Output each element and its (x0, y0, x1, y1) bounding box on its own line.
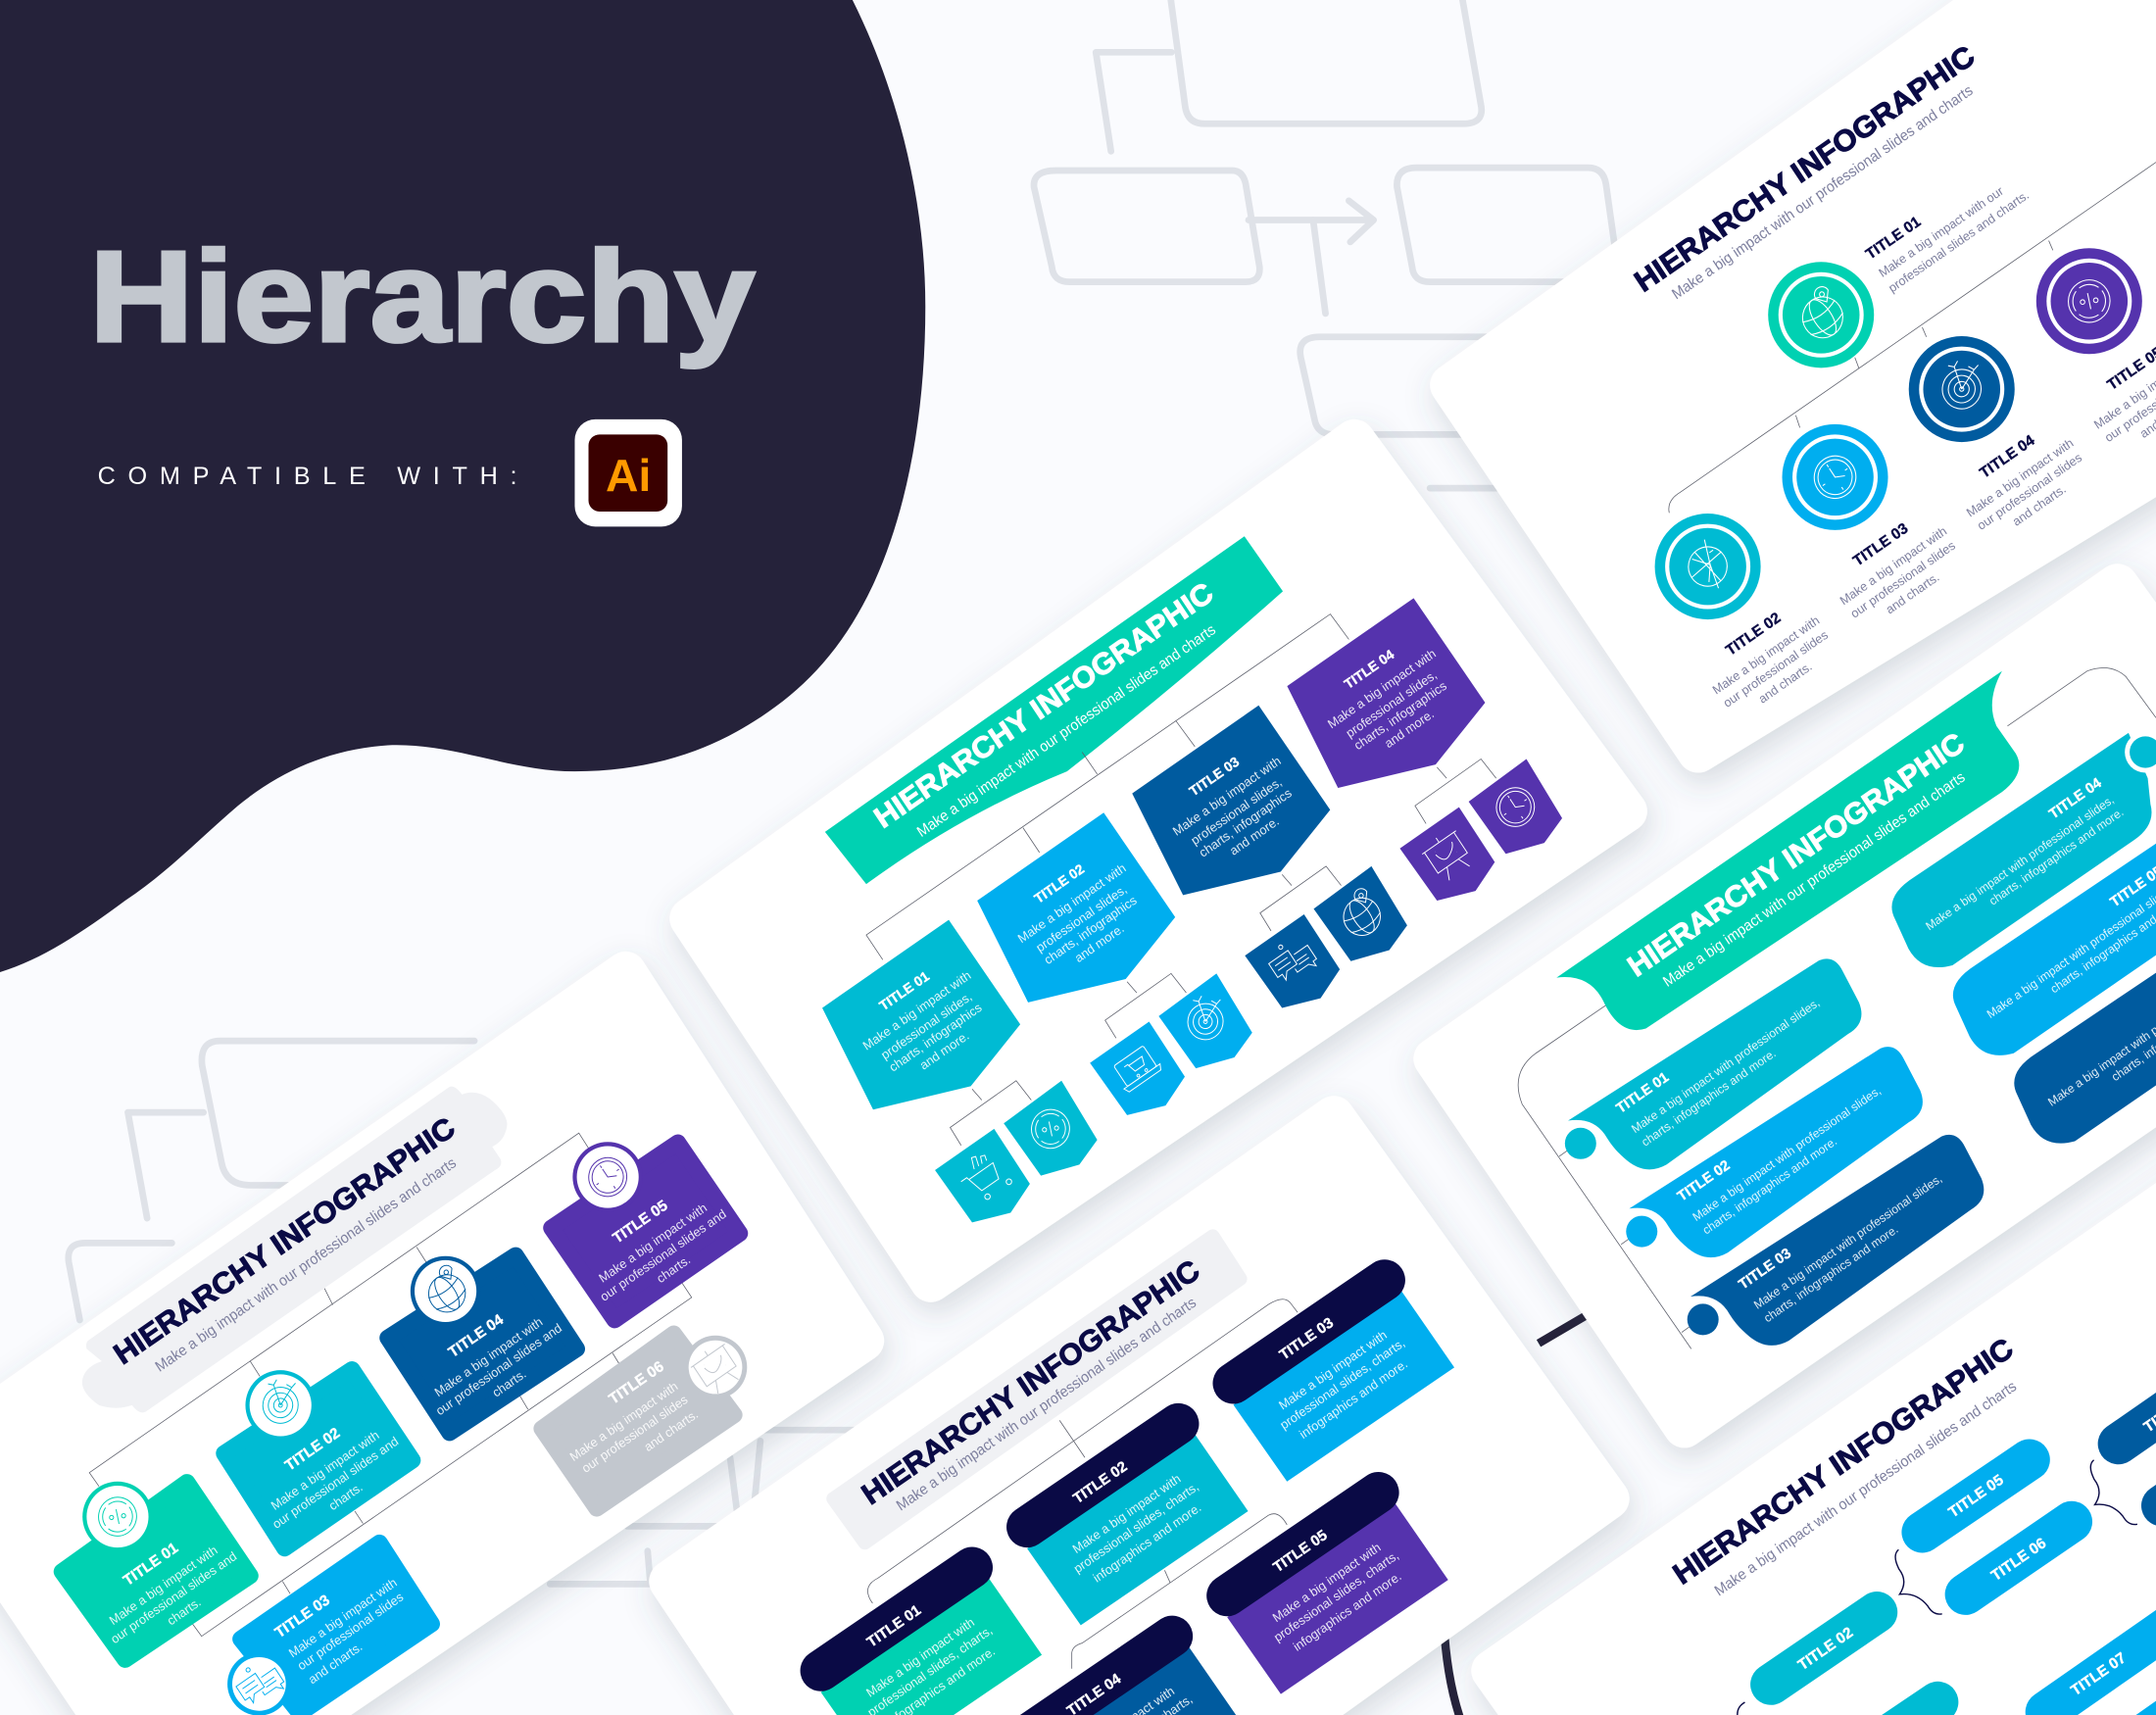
node: title 04: Make a big impact with (1964, 435, 2076, 520)
card: title 02: our professional slides and (270, 1434, 401, 1532)
card: title 04: charts, infographics (1351, 678, 1449, 753)
card: title 03 (1688, 1135, 1984, 1346)
node: title 01: TITLE 01 (1863, 213, 1924, 264)
card: title 02 (224, 1369, 413, 1548)
card: title 02: Make a big impact with professional slides, (1690, 1084, 1884, 1224)
card: title 04: TITLE 04 (1342, 646, 1396, 692)
card: title 01: Make a big impact with (863, 1615, 977, 1700)
panel: slide with ribbon cards (1434, 584, 2156, 1427)
node: title 02: and charts. (1755, 659, 1815, 707)
background hierarchy outlines (69, 0, 1620, 1584)
heading: HIERARCHY INFOGRAPHIC (857, 1254, 1205, 1511)
card: title 01 (62, 1482, 250, 1659)
card: title 03: Make a big impact with (286, 1575, 400, 1660)
card: title 05: Make a big impact with (596, 1200, 710, 1286)
card: title 04: charts. (489, 1366, 528, 1400)
card: title 02: Make a big impact with (1015, 860, 1129, 946)
braces (1738, 1460, 2137, 1715)
title blob (82, 1087, 507, 1412)
card: title 02: TITLE 02 (1070, 1458, 1130, 1507)
panel: slide with circles (1450, 0, 2156, 752)
card: title 04: TITLE 04 (446, 1311, 507, 1361)
node: title 03: our professional slides (1847, 538, 1958, 621)
pill: title 07 (2046, 1586, 2156, 1712)
node: title 04 (1909, 336, 2084, 533)
card: title 04 (1287, 598, 1562, 901)
card: title 03: and more. (1227, 813, 1282, 858)
connectors (89, 1133, 692, 1637)
pill: title 07: TITLE 07 (2068, 1649, 2129, 1699)
pill: title 05 (1922, 1459, 2030, 1532)
card: title 03: professional slides, (1188, 774, 1285, 848)
card: title 01: charts, infographics and more. (1639, 1047, 1779, 1150)
connectors (866, 614, 1348, 959)
card: title 02 (1626, 1047, 1923, 1257)
pill: title 06 (1966, 1522, 2072, 1594)
card: title 04 (1891, 731, 2156, 967)
card: title 01: charts. (165, 1594, 204, 1628)
node: title 02: our professional slides (1721, 627, 1831, 710)
card: title 05: professional slides, charts, (1271, 1547, 1401, 1644)
card: title 02: infographics and more. (1091, 1499, 1203, 1586)
heading: HIERARCHY INFOGRAPHIC (1629, 39, 1981, 299)
card: title 02: charts, infographics and more. (1700, 1134, 1839, 1237)
card: title 02: Make a big impact with (269, 1428, 382, 1513)
icon: Adobe Illustrator: Ai (606, 450, 651, 501)
card: title 04: Make a big impact with professional slides, (1923, 793, 2117, 933)
card: title 04: Make a big impact with (431, 1314, 545, 1399)
subheading: Make a big impact with our professional slides and charts (914, 621, 1219, 841)
node: title 03 (1783, 424, 1958, 621)
card: title 02: TITLE 02 (1675, 1157, 1733, 1205)
connector line (1669, 163, 2156, 513)
subheading: Make a big impact with our professional slides and charts (1712, 1378, 2020, 1599)
card: title 04: professional slides, (1344, 667, 1440, 741)
node: title 03: TITLE 03 (1850, 520, 1911, 569)
pill: title 05: TITLE 05 (1945, 1471, 2007, 1521)
panel: slide with pills and braces (1492, 986, 2156, 1715)
card: title 01: charts, infographics (886, 1000, 984, 1074)
card: title 05 (552, 1142, 740, 1320)
pill: lower cyan (1832, 1702, 1937, 1715)
card: title 03: professional slides, charts, (1277, 1335, 1407, 1432)
card: title 01: Make a big impact with (860, 967, 973, 1054)
pill: lower blue (2088, 1647, 2156, 1715)
card: title 03: Make a big impact with professional slides, (1751, 1171, 1944, 1312)
card: title 04: and more. (1382, 707, 1437, 751)
card: title 04 (388, 1255, 577, 1433)
node: title 05 (2036, 248, 2156, 445)
node: title 04: and charts. (2010, 481, 2069, 529)
card: title 02 (977, 812, 1252, 1115)
title tag (833, 1236, 1241, 1543)
pill: title 02 (1771, 1612, 1877, 1685)
card: title 01: Make a big impact with (107, 1543, 220, 1628)
subheading: Make a big impact with our professional slides and charts (153, 1154, 460, 1376)
panel: slide with dark header cards (669, 1116, 1609, 1715)
card: title 05: charts. (654, 1252, 693, 1286)
pill: title 02: TITLE 02 (1795, 1624, 1856, 1674)
node: title 02: Make a big impact with (1710, 612, 1822, 698)
banner (825, 536, 1283, 884)
card: title 02: charts. (326, 1480, 366, 1513)
card: title 02: and more. (1072, 920, 1127, 965)
card: title 03: infographics and more. (1297, 1356, 1410, 1442)
card: title 03: our professional slides (295, 1590, 406, 1673)
card: title 06: and charts. (641, 1406, 701, 1454)
card: title 05 (1953, 819, 2156, 1055)
card: title 03: Make a big impact with (1170, 754, 1284, 839)
connectors (1518, 668, 2156, 1348)
card: title 03 (227, 1543, 432, 1715)
card: title 02: TITLE 02 (1031, 860, 1087, 906)
card: title 01: and more. (917, 1028, 971, 1072)
card: title 04 (1021, 1637, 1242, 1715)
pill: navy upper (2119, 1368, 2156, 1444)
card: title 01: professional slides, (878, 989, 974, 1062)
card: title 01: TITLE 01 (121, 1540, 181, 1590)
heading: HIERARCHY INFOGRAPHIC (109, 1111, 461, 1371)
card: title 05: TITLE 05 (1270, 1527, 1330, 1576)
card: title 01: our professional slides and (108, 1548, 239, 1646)
card: title 04: TITLE 04 (2046, 775, 2105, 822)
panel: slide with banner and pennants (690, 440, 1627, 1282)
card: title 02: TITLE 02 (282, 1425, 343, 1475)
node: title 01: Make a big impact with our (1876, 183, 2006, 280)
card: title 01: TITLE 01 (1614, 1069, 1672, 1117)
card: title 03: charts, infographics (1197, 785, 1295, 860)
card: title 03 (1132, 706, 1407, 1007)
connectors (867, 1299, 1298, 1669)
card: title 06: Make a big impact with (567, 1379, 680, 1464)
card: title 01 (1565, 958, 1861, 1169)
card: title 06 (542, 1334, 747, 1508)
card: title 06 (2014, 908, 2156, 1144)
node: title 02 (1655, 514, 1831, 710)
card: title 06: our professional slides (579, 1392, 690, 1476)
card: title 01: TITLE 01 (864, 1602, 924, 1651)
card: title 01 (821, 1567, 1042, 1715)
subheading: Make a big impact with our professional slides and charts (894, 1295, 1200, 1514)
node: title 04: our professional slides (1975, 450, 2084, 533)
card: title 06: TITLE 06 (607, 1358, 667, 1408)
card: title 04: our professional slides and (433, 1320, 564, 1418)
card: title 05 (1227, 1493, 1448, 1694)
card: title 02: professional slides, (1033, 882, 1130, 956)
card: title 03: TITLE 03 (1737, 1246, 1794, 1293)
panel: slide with rounded badge cards (0, 972, 863, 1715)
card: title 04: Make a big impact with (1325, 646, 1439, 731)
card: title 03 (1234, 1280, 1454, 1482)
card: title 01 (822, 920, 1098, 1222)
subheading: Make a big impact with our professional slides and charts (1669, 82, 1977, 303)
card: title 02 (1027, 1424, 1249, 1625)
node: title 01: professional slides and charts. (1886, 187, 2032, 295)
text: compatible with: COMPATIBLE WITH: (98, 463, 517, 490)
subheading: Make a big impact with our professional slides and charts (1660, 768, 1969, 991)
card: title 05: TITLE 05 (610, 1197, 671, 1247)
card: title 03: charts, infographics and more. (1761, 1222, 1900, 1325)
node: title 04: TITLE 04 (1977, 432, 2038, 482)
icon: Adobe Illustrator (574, 419, 682, 526)
pill: title 06: TITLE 06 (1988, 1535, 2049, 1585)
card: title 04: charts, infographics and more. (1986, 805, 2126, 908)
dark blob (0, 0, 925, 972)
heading: HIERARCHY INFOGRAPHIC (868, 576, 1219, 835)
card: title 03: TITLE 03 (1277, 1314, 1337, 1363)
card: title 02: charts, infographics (1042, 893, 1140, 967)
node: title 03: and charts. (1883, 569, 1941, 616)
card: title 03: Make a big impact with (1276, 1327, 1390, 1413)
node: title 03: Make a big impact with (1837, 523, 1949, 608)
card: title 02: Make a big impact with (1070, 1471, 1183, 1556)
title: Hierarchy: Hierarchy (89, 224, 755, 368)
dark line fragments (1444, 1316, 1586, 1715)
card: title 03: TITLE 03 (272, 1592, 333, 1642)
card: title 03: TITLE 03 (1186, 754, 1242, 799)
heading: HIERARCHY INFOGRAPHIC (1622, 727, 1971, 983)
banner (1556, 671, 2019, 1030)
card: title 03: and charts. (306, 1639, 365, 1687)
card: title 01: Make a big impact with professional slides, (1629, 996, 1822, 1136)
card: title 05: Make a big impact with (1270, 1540, 1383, 1625)
card: title 05: our professional slides and (598, 1206, 729, 1304)
card: title 01: TITLE 01 (876, 968, 932, 1013)
card: title 02: professional slides, charts, (1071, 1479, 1201, 1576)
node: title 01 (1768, 183, 2032, 368)
card: title 05: infographics and more. (1291, 1569, 1404, 1654)
node: title 02: TITLE 02 (1723, 610, 1784, 660)
heading: HIERARCHY INFOGRAPHIC (1668, 1332, 2019, 1592)
